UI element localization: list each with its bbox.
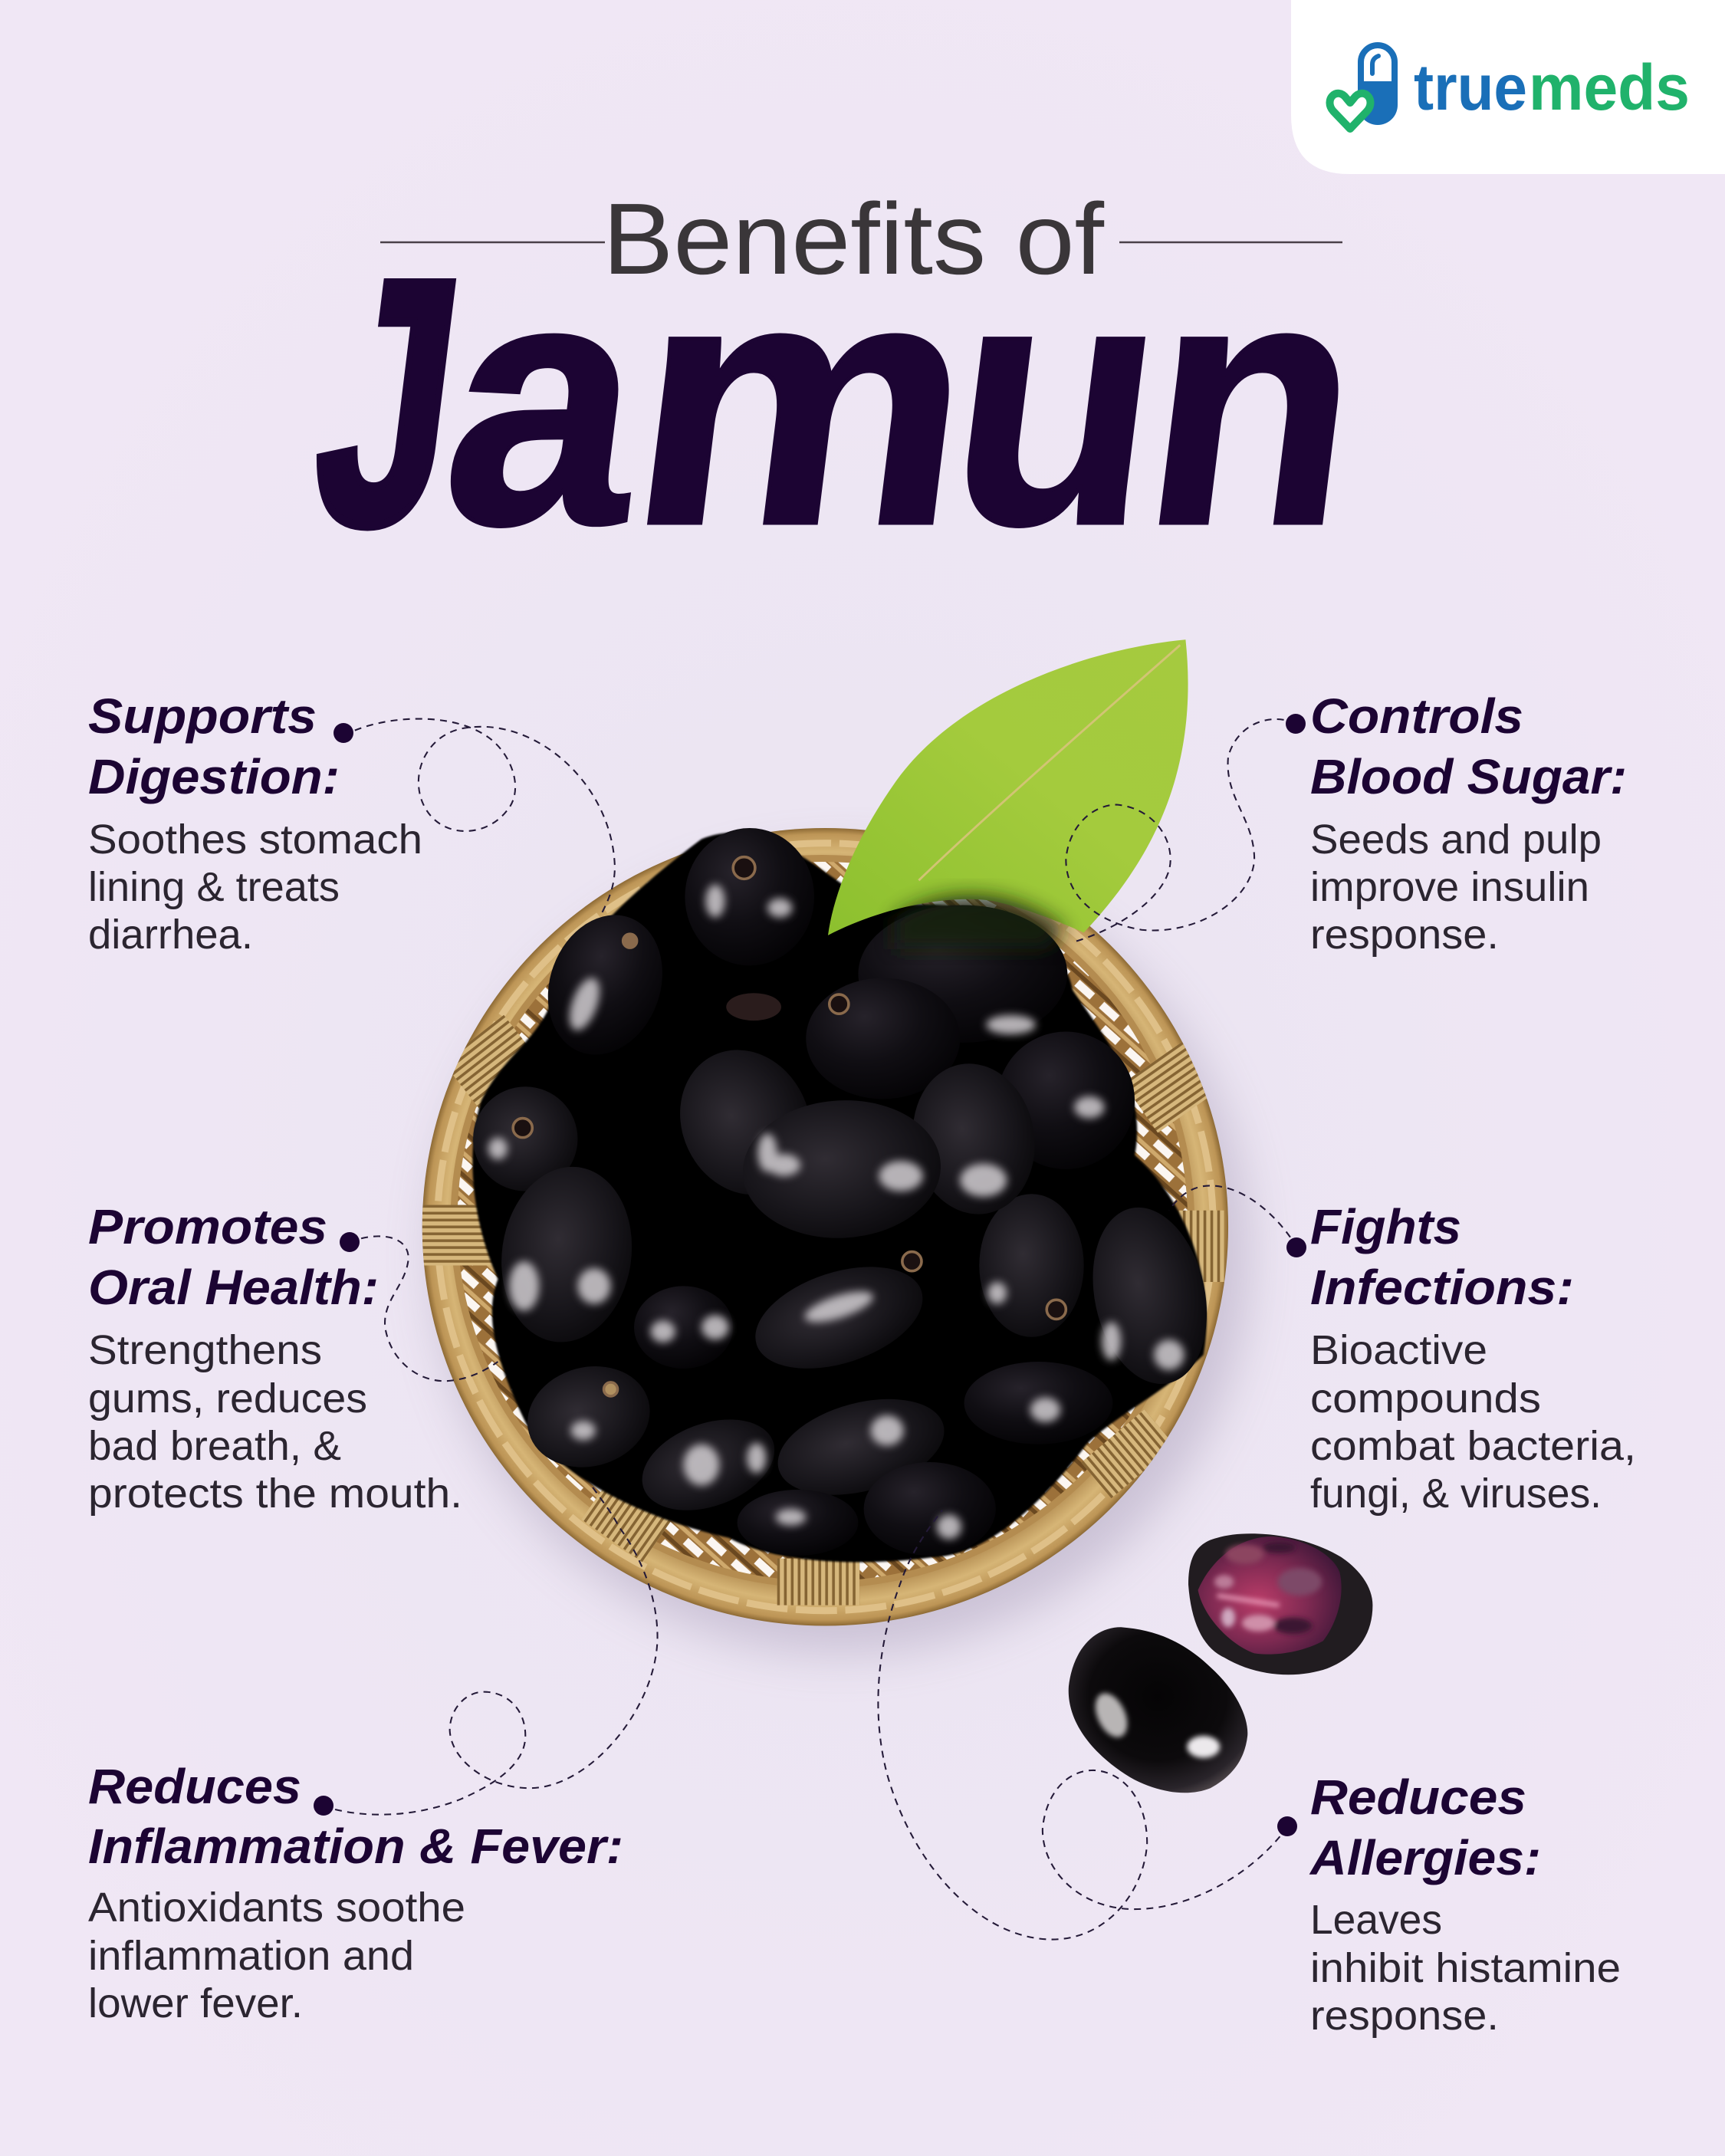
description (88, 1885, 465, 2026)
heading (1309, 1770, 1541, 1885)
photo: basket of jamun with leaf (422, 639, 1372, 1793)
callout: Reduces Inflammation and Fever (88, 1759, 623, 2026)
logo wordmark: true (1414, 51, 1527, 123)
whole jamun (1069, 1627, 1247, 1793)
description: combat bacteria, (1310, 1423, 1636, 1469)
heading (1310, 1199, 1574, 1315)
title: Jamun: J (299, 208, 478, 597)
description: Seeds and pulp (1310, 817, 1602, 863)
description (88, 1327, 462, 1517)
description: Leaves (1310, 1897, 1442, 1943)
heading: Reduces (1310, 1770, 1526, 1825)
callout: Reduces Allergies (1309, 1770, 1621, 2039)
logo wordmark (1414, 51, 1690, 123)
description: lower fever. (88, 1980, 303, 2026)
icon: heart (1329, 94, 1371, 129)
heading: Infections: (1310, 1260, 1574, 1315)
description (1310, 1327, 1636, 1517)
description: Strengthens (88, 1327, 322, 1373)
leaf (828, 639, 1188, 949)
icon: capsule (1358, 45, 1398, 125)
logo panel: truemeds (1291, 0, 1725, 174)
heading: Reduces (88, 1759, 301, 1814)
description (1310, 817, 1602, 958)
heading: Supports (88, 689, 317, 744)
heading: Controls (1310, 689, 1523, 744)
heading: Allergies: (1309, 1830, 1541, 1885)
description: protects the mouth. (88, 1471, 462, 1517)
description: compounds (1310, 1375, 1541, 1421)
description: Antioxidants soothe (88, 1885, 465, 1931)
description: bad breath, & (88, 1423, 341, 1469)
heading: Fights (1310, 1199, 1461, 1254)
heading: Promotes (88, 1199, 327, 1254)
title: Jamun: m (614, 208, 994, 597)
description: improve insulin (1310, 864, 1589, 910)
title: Jamun: u (932, 208, 1183, 597)
heading: Digestion: (88, 749, 340, 804)
heading (88, 1199, 379, 1315)
callout: Fights Infections (1310, 1199, 1636, 1517)
logo wordmark: meds (1529, 51, 1690, 123)
title: Benefits of: Benefits of (603, 182, 1104, 295)
heading: Oral Health: (88, 1260, 379, 1315)
callout: Promotes Oral Health (88, 1199, 462, 1517)
berry mass (472, 833, 1207, 1562)
basket shadow (435, 856, 1249, 1653)
halved jamun (1188, 1533, 1372, 1675)
description: lining & treats (88, 864, 340, 910)
title: Jamun: n (1129, 208, 1381, 597)
callout: Supports Digestion (88, 689, 422, 958)
basket (422, 828, 1234, 1626)
description (1310, 1897, 1621, 2039)
description: inflammation and (88, 1933, 414, 1979)
heading: Inflammation & Fever: (88, 1819, 623, 1874)
marker dots (314, 714, 1306, 1836)
callout: Controls Blood Sugar (1310, 689, 1627, 958)
heading (88, 1759, 623, 1874)
heading (1310, 689, 1627, 804)
berry stem holes (513, 857, 1066, 1396)
description: fungi, & viruses. (1310, 1471, 1602, 1517)
description: inhibit histamine (1310, 1945, 1621, 1991)
heading: Blood Sugar: (1310, 749, 1627, 804)
description: Soothes stomach (88, 817, 422, 863)
description: response. (1310, 1993, 1499, 2039)
berries (473, 828, 1222, 1556)
title: Jamun: a (428, 208, 664, 597)
dashed connector lines (324, 719, 1297, 1940)
description: Bioactive (1310, 1327, 1487, 1373)
description (88, 817, 422, 958)
berry highlights (488, 885, 1184, 1539)
heading (88, 689, 340, 804)
description: response. (1310, 912, 1499, 958)
description: diarrhea. (88, 912, 253, 958)
description: gums, reduces (88, 1375, 367, 1421)
